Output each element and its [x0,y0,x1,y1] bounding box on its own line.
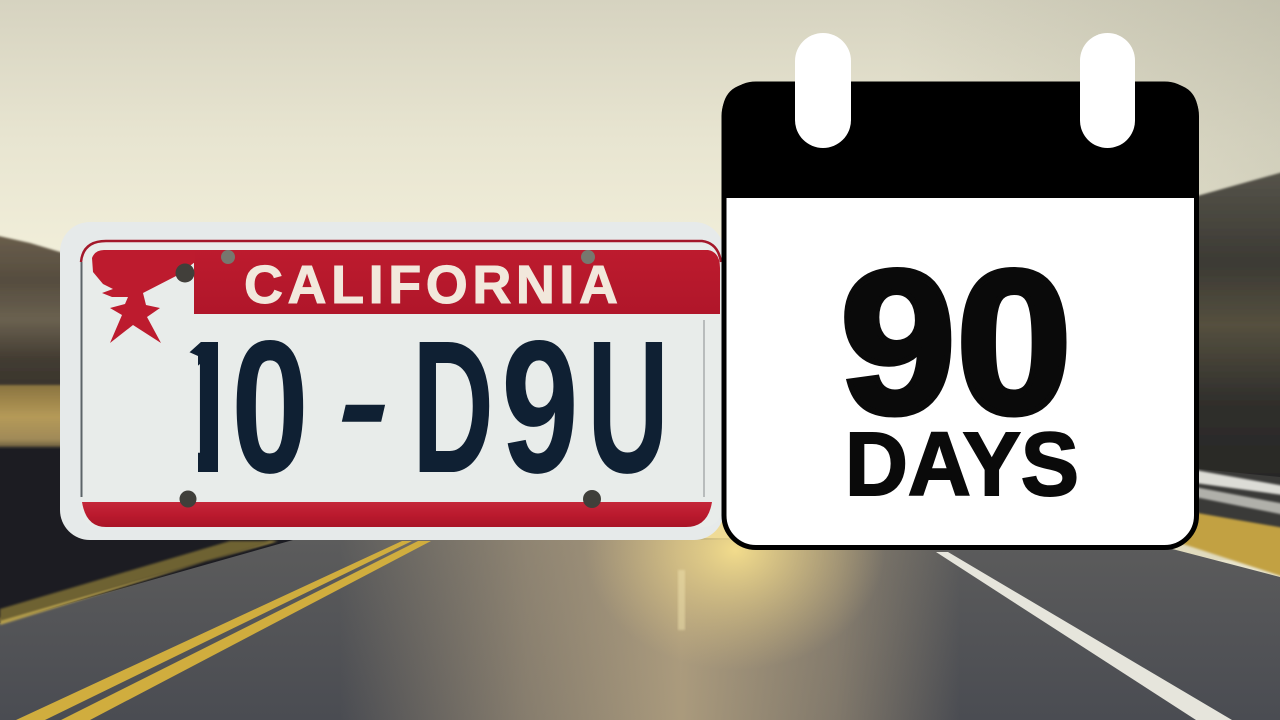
plate: left edge line [80,262,82,497]
background: left hills and roadside [0,234,340,628]
calendar: left binding ring [795,33,851,148]
plate: inner body [81,241,722,527]
plate number: 10 - D9U: 0 [231,301,309,513]
plate: red corner with star [92,250,195,343]
plate number: 10 - D9U: 1 [168,301,244,512]
calendar [722,33,1198,548]
plate: right edge line [703,320,705,497]
background: sky [0,0,1280,560]
calendar: black header [722,83,1198,198]
plate number: 10 - D9U: U [587,302,669,513]
plate: dark red top outline [81,241,721,262]
plate heading: CALIFORNIA: CALIFORNIA [244,255,618,315]
plate number: 10 - D9U: D [412,302,494,513]
plate: outer frame [60,222,724,540]
plate number: 10 - D9U: - [322,322,411,480]
calendar label: DAYS: DAYS [845,415,1079,515]
calendar: right binding ring [1080,33,1135,148]
plate number: 10 - D9U: 9 [501,301,579,513]
calendar: white page [724,84,1196,548]
plate: red top band [92,250,720,314]
background: right hills and roadside [1100,170,1280,579]
plate number: 10 - D9U [190,340,662,474]
background: road surface [0,430,1280,720]
plate: red bottom band [82,502,712,527]
plate: screws [176,250,601,508]
calendar number: 90: 90 [840,228,1072,456]
license plate [60,222,724,540]
